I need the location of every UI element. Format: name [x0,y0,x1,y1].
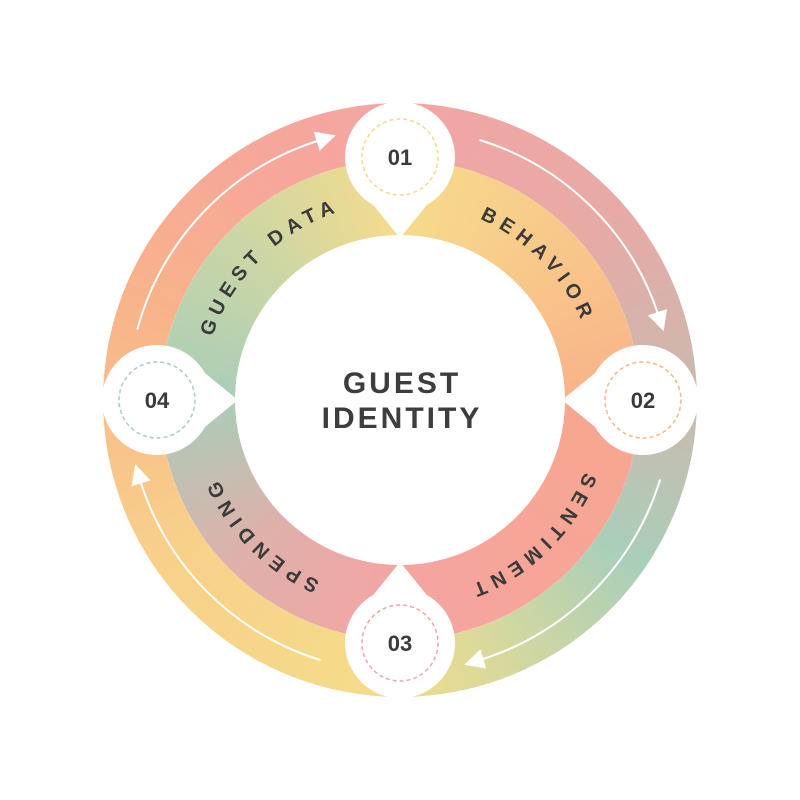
ring labels [201,202,596,597]
center title [322,367,482,435]
center title: IDENTITY [322,402,482,435]
badge 02 [562,345,698,455]
outer ring [103,103,697,697]
badge 03 [345,562,455,698]
cycle arrows [137,140,660,660]
ring labels: BEHAVIOR [481,206,592,320]
ring labels: GUEST DATA [201,202,335,334]
inner ring [160,160,640,640]
badge 01: 01 [388,145,412,170]
ring labels: SENTIMENT [476,474,596,597]
center title: GUEST [343,367,461,400]
badge 04: 04 [145,388,170,413]
badge 03: 03 [388,631,412,656]
badge 04 [102,345,238,455]
ring labels: SPENDING [208,482,318,592]
badge 02: 02 [631,388,655,413]
badge 01 [345,102,455,238]
